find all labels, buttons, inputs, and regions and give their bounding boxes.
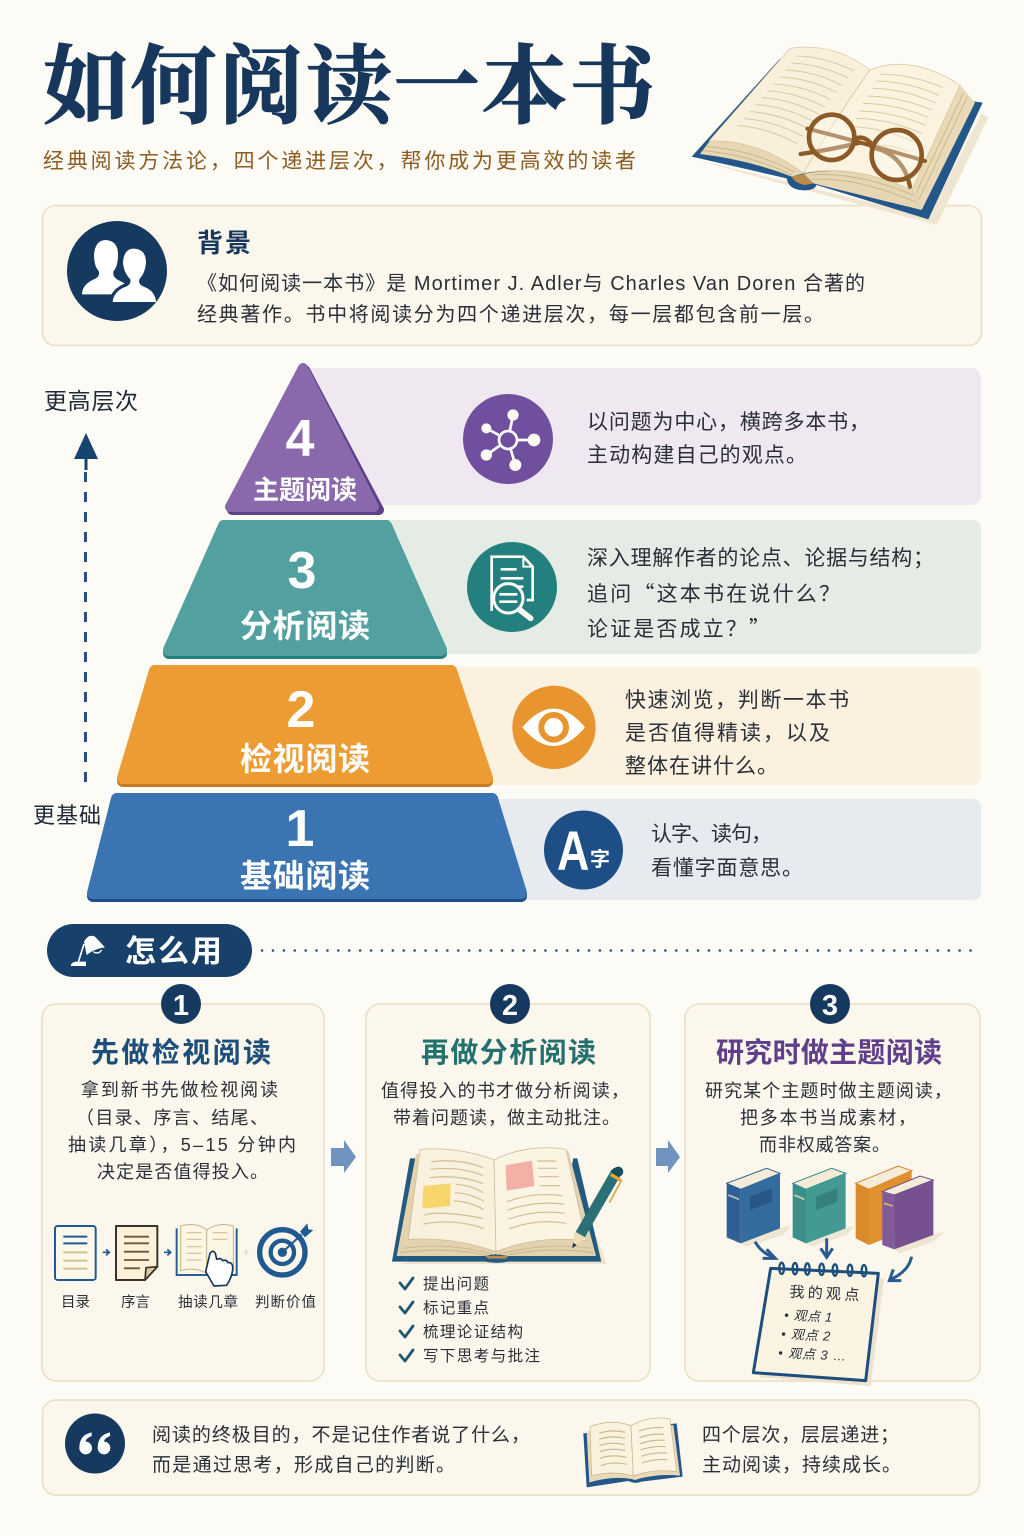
step 3 text: 研究某个主题时做主题阅读， [705, 1081, 952, 1101]
quote text: 阅读的终极目的，不是记住作者说了什么， [152, 1424, 530, 1446]
icon: small open book [583, 1418, 683, 1487]
step 2 badge: 2 [502, 990, 518, 1022]
level 4 description: 主动构建自己的观点。 [587, 444, 807, 467]
level 2 description [512, 686, 849, 778]
level 3: analytical reading: 分析阅读 [240, 608, 370, 644]
axis: higher level arrow: 更高层次 [44, 388, 138, 414]
axis: higher level arrow [33, 388, 138, 828]
icon: network [463, 394, 553, 484]
teal book [793, 1168, 846, 1243]
icon: A and character: 字 [590, 847, 610, 871]
icon labels: 判断价值 [255, 1294, 316, 1311]
level 4 description: 以问题为中心，横跨多本书， [587, 411, 870, 434]
icon: quotation mark [65, 1414, 125, 1474]
icon: A and character [544, 810, 623, 890]
illustration: open book with glasses [692, 47, 988, 225]
panel: closing quote [42, 1400, 980, 1495]
step 1 text [68, 1079, 296, 1182]
step 2 text: 值得投入的书才做分析阅读， [381, 1081, 629, 1101]
level 2 description: 快速浏览，判断一本书 [625, 689, 849, 712]
subtitle: 经典阅读方法论，四个递进层次，帮你成为更高效的读者 [43, 150, 636, 173]
blue book [727, 1168, 780, 1243]
level 3 description: 深入理解作者的论点、论据与结构； [587, 547, 934, 570]
step 2 badge [490, 984, 530, 1024]
closing text: 主动阅读，持续成长。 [702, 1454, 901, 1476]
axis: higher level arrow: 更基础 [33, 803, 101, 828]
icon labels [61, 1293, 316, 1311]
dotted divider [262, 949, 980, 952]
level 3: analytical reading: 3 [288, 542, 316, 600]
notebook text: • 观点 2 [781, 1326, 831, 1344]
purple book [882, 1176, 933, 1249]
level 3: analytical reading [169, 526, 441, 653]
level 1: basic reading: 1 [286, 800, 314, 858]
icon: eye [512, 686, 596, 769]
level 3 description: 追问“这本书在说什么？ [587, 578, 840, 608]
icon labels: 抽读几章 [178, 1293, 238, 1311]
quote text [152, 1424, 530, 1476]
checklist: 梳理论证结构 [423, 1323, 523, 1341]
level 1: basic reading: 基础阅读 [240, 858, 370, 894]
step 1 heading: 先做检视阅读 [91, 1037, 271, 1068]
illustration: books feeding a notebook [727, 1166, 945, 1386]
arrows to notebook [755, 1238, 912, 1281]
icon: document with magnifier [467, 542, 557, 632]
icon: two people [67, 221, 167, 321]
step 2 text: 带着问题读，做主动批注。 [393, 1108, 620, 1128]
notebook text: 我的观点 [789, 1284, 860, 1304]
checklist: 提出问题 [423, 1275, 489, 1293]
background heading: 背景 [197, 228, 251, 258]
illustration: annotated book and pen [392, 1148, 622, 1264]
step 2 heading: 再做分析阅读 [421, 1037, 596, 1068]
checklist [400, 1275, 540, 1365]
level 2: inspectional reading: 检视阅读 [240, 741, 370, 777]
panel: step 3 [685, 984, 980, 1386]
section header: how to use: 怎么用 [125, 934, 222, 969]
level 2 description: 是否值得精读，以及 [625, 722, 830, 745]
level 1 description [544, 810, 803, 890]
level 4: thematic reading [230, 368, 379, 510]
icon labels: 目录 [61, 1294, 90, 1311]
notebook text: • 观点 1 [784, 1307, 833, 1325]
icon labels: 序言 [121, 1294, 150, 1311]
closing text [702, 1424, 901, 1476]
notebook [753, 1263, 884, 1386]
step 3 heading: 研究时做主题阅读 [716, 1037, 942, 1068]
background text: 经典著作。书中将阅读分为四个递进层次，每一层都包含前一层。 [197, 303, 824, 326]
title: 如何阅读一本书 [43, 39, 657, 135]
step 3 text: 而非权威答案。 [759, 1135, 890, 1155]
level 2: inspectional reading [123, 671, 487, 781]
background text: 《如何阅读一本书》是 Mortimer J. Adler与 Charles Van Doren 合著的 [197, 272, 865, 295]
level 1 description: 看懂字面意思。 [651, 857, 803, 880]
panel: background [42, 206, 982, 346]
level 2 description: 整体在讲什么。 [625, 755, 778, 778]
level 1: basic reading [93, 799, 521, 896]
step 3 badge: 3 [822, 990, 838, 1022]
step 1 text: （目录、序言、结尾、 [76, 1108, 268, 1128]
checklist: 写下思考与批注 [423, 1347, 540, 1365]
step 1 text: 决定是否值得投入。 [97, 1162, 268, 1182]
closing text: 四个层次，层层递进； [702, 1424, 899, 1446]
step 3 badge [810, 984, 850, 1024]
panel: step 2 [366, 984, 650, 1381]
orange book [856, 1166, 912, 1245]
level 4 description [463, 394, 870, 484]
notebook text: • 观点 3 … [778, 1345, 847, 1364]
step 1 badge [161, 984, 201, 1024]
checklist: 标记重点 [423, 1299, 489, 1317]
icon: A and character: A [557, 819, 589, 882]
step 1 text: 拿到新书先做检视阅读 [81, 1079, 278, 1100]
level 3 description [467, 542, 934, 643]
background text [197, 272, 865, 326]
level 1 description: 认字、读句， [651, 823, 772, 846]
step 3 text: 把多本书当成素材， [740, 1108, 916, 1128]
level 2: inspectional reading: 2 [287, 681, 315, 739]
icon: desk lamp [71, 936, 105, 966]
step 1 badge: 1 [173, 990, 189, 1022]
step 1 text: 抽读几章），5–15 分钟内 [68, 1135, 296, 1155]
notebook text [778, 1283, 860, 1364]
step 3 text [705, 1081, 952, 1155]
arrow: step 2 to 3 [656, 1140, 680, 1173]
row bars [300, 368, 981, 900]
quote text: 而是通过思考，形成自己的判断。 [152, 1454, 455, 1476]
icon flow: table of contents, preface, sample chapters, judge value [55, 1223, 313, 1286]
level 4: thematic reading: 主题阅读 [253, 475, 357, 505]
level 3 description: 论证是否成立？” [587, 613, 770, 643]
level 4: thematic reading: 4 [286, 410, 315, 468]
panel: step 1 [42, 984, 324, 1381]
arrow: step 1 to 2 [331, 1140, 356, 1173]
step 2 text [381, 1081, 629, 1128]
section header: how to use [47, 924, 252, 977]
